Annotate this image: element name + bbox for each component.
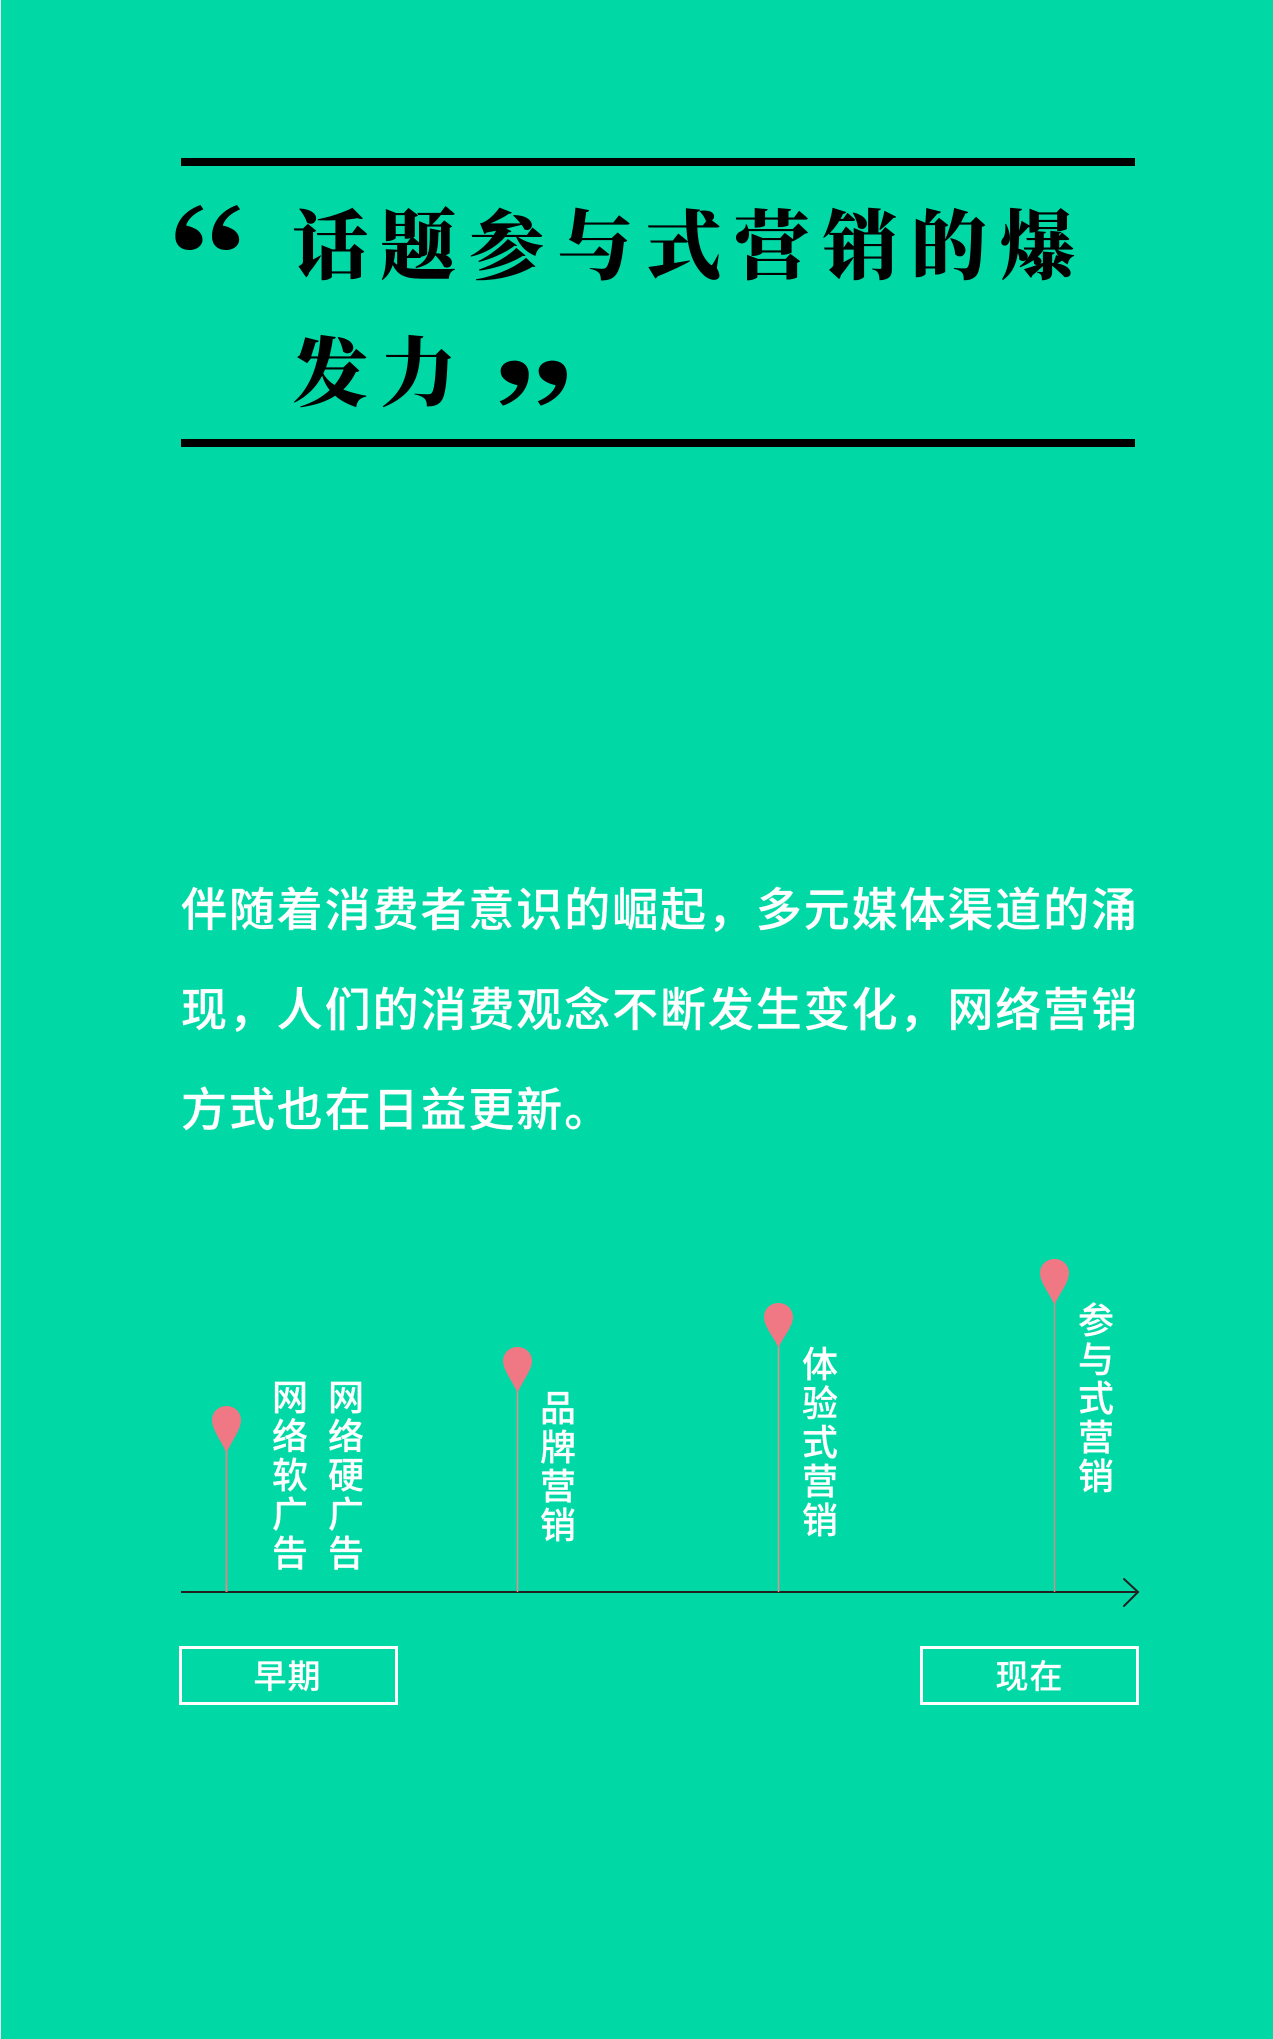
label: experiential marketing: 销 bbox=[802, 1500, 838, 1541]
label: online hard ads: 络 bbox=[328, 1416, 364, 1457]
left edge sliver bbox=[0, 0, 1, 2039]
label: brand marketing: 营 bbox=[540, 1466, 576, 1507]
label: participatory marketing: 销 bbox=[1078, 1456, 1114, 1497]
top rule bbox=[181, 158, 1135, 166]
box: present bbox=[920, 1646, 1139, 1705]
label: online soft ads bbox=[272, 1377, 308, 1574]
title line 1: 话题参与式营销的爆 bbox=[292, 206, 1088, 290]
label: participatory marketing: 与 bbox=[1078, 1339, 1114, 1380]
label: participatory marketing: 参 bbox=[1078, 1300, 1114, 1341]
closing quote mark: ” bbox=[488, 324, 650, 514]
paragraph line 2: 现，人们的消费观念不断发生变化，网络营销 bbox=[181, 984, 1139, 1036]
timeline axis with arrow bbox=[181, 1579, 1138, 1606]
bottom rule bbox=[181, 439, 1135, 447]
label: participatory marketing: 式 bbox=[1078, 1378, 1114, 1419]
title line 2: 发力 bbox=[292, 333, 469, 417]
body paragraph bbox=[181, 884, 1139, 1136]
pin: experiential marketing bbox=[764, 1303, 793, 1592]
label: brand marketing: 销 bbox=[540, 1505, 576, 1546]
label: online hard ads: 网 bbox=[328, 1377, 364, 1418]
label: brand marketing: 品 bbox=[540, 1388, 576, 1429]
pin: online ads bbox=[212, 1406, 241, 1592]
label: online hard ads bbox=[328, 1377, 364, 1574]
label: online hard ads: 告 bbox=[328, 1533, 364, 1574]
pin: brand marketing bbox=[503, 1347, 532, 1592]
paragraph line 3: 方式也在日益更新。 bbox=[181, 1084, 612, 1136]
label: brand marketing bbox=[540, 1388, 576, 1546]
label: participatory marketing bbox=[1078, 1300, 1114, 1497]
label: online soft ads: 广 bbox=[272, 1494, 308, 1535]
label: experiential marketing: 营 bbox=[802, 1461, 838, 1502]
label: experiential marketing: 验 bbox=[802, 1383, 838, 1424]
box: early period bbox=[179, 1646, 398, 1705]
label: online soft ads: 告 bbox=[272, 1533, 308, 1574]
label: participatory marketing: 营 bbox=[1078, 1417, 1114, 1458]
label: online soft ads: 络 bbox=[272, 1416, 308, 1457]
box: present: 现在 bbox=[996, 1658, 1064, 1695]
label: experiential marketing: 体 bbox=[802, 1344, 838, 1385]
label: online hard ads: 硬 bbox=[328, 1455, 364, 1496]
label: brand marketing: 牌 bbox=[540, 1427, 576, 1468]
opening quote mark: “ bbox=[96, 168, 252, 358]
label: online soft ads: 网 bbox=[272, 1377, 308, 1418]
paragraph line 1: 伴随着消费者意识的崛起，多元媒体渠道的涌 bbox=[181, 884, 1139, 936]
label: online soft ads: 软 bbox=[272, 1455, 308, 1496]
label: experiential marketing bbox=[802, 1344, 838, 1541]
label: online hard ads: 广 bbox=[328, 1494, 364, 1535]
box: early period: 早期 bbox=[254, 1658, 322, 1695]
label: experiential marketing: 式 bbox=[802, 1422, 838, 1463]
pin: participatory marketing bbox=[1040, 1259, 1069, 1592]
title block bbox=[96, 158, 1135, 514]
